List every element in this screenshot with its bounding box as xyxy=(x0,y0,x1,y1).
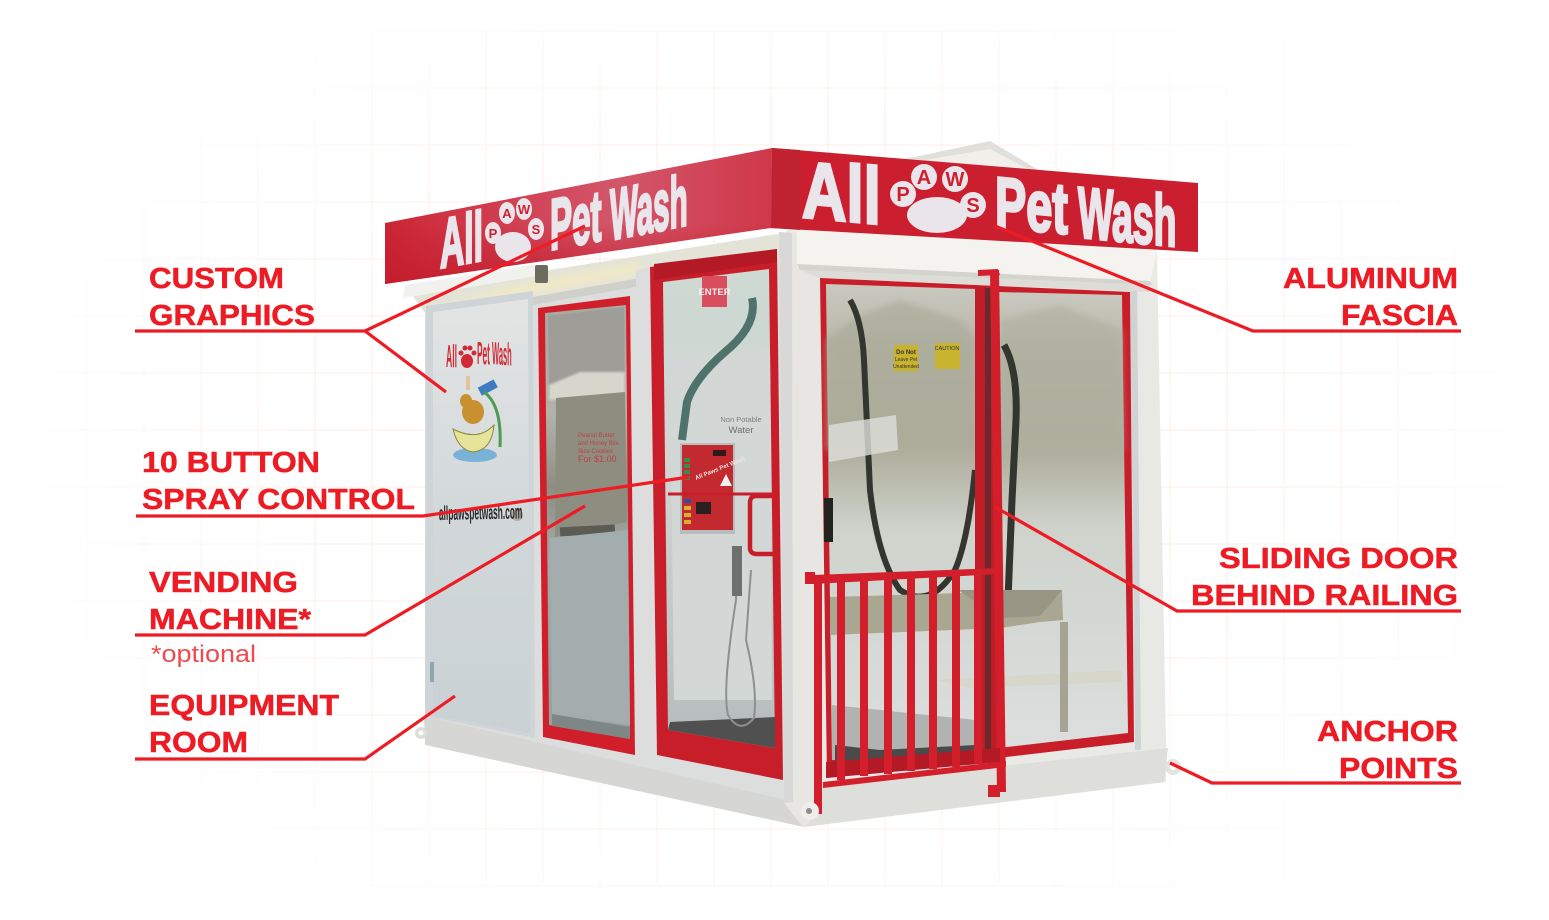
label: sliding door behind railing: SLIDING DOOR xyxy=(1219,543,1458,575)
left fascia sign xyxy=(385,148,772,284)
window reflections xyxy=(548,307,625,395)
leader: spray control xyxy=(136,477,689,516)
leader: aluminum fascia xyxy=(995,226,1461,331)
tree reflections xyxy=(826,300,976,450)
door decal logo: All xyxy=(446,338,457,374)
door decal logo: Wash xyxy=(492,335,512,373)
label: sliding door behind railing xyxy=(1191,543,1458,612)
vending machine window: Size Cookies xyxy=(578,449,613,455)
right post xyxy=(1130,280,1166,750)
right wall xyxy=(786,230,1166,827)
right base xyxy=(804,748,1168,827)
label: anchor points: ANCHOR xyxy=(1317,716,1458,748)
white panel under right fascia xyxy=(797,226,1157,284)
yellow warning signs: CAUTION xyxy=(935,346,959,352)
entry door xyxy=(650,249,783,780)
left fascia sign: Pet xyxy=(550,175,602,265)
light bar and camera xyxy=(403,264,548,298)
leader: sliding door xyxy=(995,507,1461,611)
kiosk photo illustration xyxy=(385,141,1198,828)
wash tub xyxy=(830,590,1063,635)
wash hose xyxy=(682,298,753,440)
vending machine window xyxy=(538,296,635,755)
label: 10 button spray control: 10 BUTTON xyxy=(142,447,320,479)
door web address: allpawspetwash.com xyxy=(439,502,523,525)
paw logo xyxy=(485,198,544,262)
leader: custom graphics xyxy=(135,226,585,392)
yellow warning signs: Unattended xyxy=(893,364,919,370)
label: custom graphics xyxy=(149,263,315,332)
label: vending machine: MACHINE* xyxy=(149,604,312,636)
left fascia sign: All xyxy=(440,196,483,283)
label: anchor points xyxy=(1317,716,1458,785)
right fascia sign: Wash xyxy=(1078,173,1176,263)
paw logo: W xyxy=(518,202,531,217)
label: sliding door behind railing: BEHIND RAILING xyxy=(1191,580,1458,612)
sliding door railing xyxy=(805,269,1006,814)
door decal logo xyxy=(446,335,512,374)
left base xyxy=(424,716,804,827)
back wall xyxy=(670,350,772,700)
paw logo: S xyxy=(532,222,541,237)
sprayer and hose xyxy=(726,546,755,726)
upper left wall trim xyxy=(410,232,790,320)
vending machine window: and Honey Bite xyxy=(578,441,620,447)
dark wash hose xyxy=(850,300,975,597)
label: 10 button spray control: SPRAY CONTROL xyxy=(142,484,415,516)
door knob xyxy=(511,509,523,521)
yellow warning signs xyxy=(893,343,960,371)
label: custom graphics: CUSTOM xyxy=(149,263,284,295)
vertical post between windows xyxy=(636,267,656,757)
callout lines xyxy=(135,226,1461,783)
door decal logo: Pet xyxy=(477,335,490,371)
notice on glass xyxy=(829,415,898,462)
equipment room door xyxy=(425,291,535,738)
paw logo: W xyxy=(946,169,965,191)
paw logo: S xyxy=(966,195,980,217)
leader: vending machine xyxy=(135,506,585,635)
roof gable xyxy=(900,141,1042,172)
note: optional: *optional xyxy=(151,641,256,668)
water sign: Non Potable xyxy=(720,415,762,424)
door lock xyxy=(824,498,833,542)
label: equipment room xyxy=(149,690,339,759)
paw logo: A xyxy=(917,167,931,189)
anchor points xyxy=(415,727,1181,820)
leader: equipment room xyxy=(135,696,455,759)
floor mat xyxy=(668,717,775,748)
10 button spray control panel xyxy=(680,443,746,534)
paw logo: P xyxy=(489,226,498,241)
enter sign xyxy=(698,276,731,307)
corner post xyxy=(779,232,823,828)
vending sign text: Peanut Butter xyxy=(578,433,615,439)
water sign xyxy=(720,415,762,436)
icon: washing dog in tub xyxy=(453,376,500,462)
label: custom graphics: GRAPHICS xyxy=(149,300,315,332)
center mullions xyxy=(975,286,998,751)
enter sign: ENTER xyxy=(698,287,731,298)
yellow warning signs: Leave Pet xyxy=(895,357,918,363)
paw logo: P xyxy=(896,184,910,206)
label: vending machine xyxy=(149,567,312,636)
right fascia sign: All xyxy=(802,145,881,242)
10 button spray control panel: All Paws Pet Wash xyxy=(695,456,746,482)
label: aluminum fascia: ALUMINUM xyxy=(1283,263,1458,295)
label: aluminum fascia: FASCIA xyxy=(1341,300,1458,332)
door push bar and pull handle xyxy=(668,494,776,554)
yellow warning signs: Do Not xyxy=(896,350,916,356)
left fascia sign: Wash xyxy=(610,160,688,256)
front glass left pane xyxy=(820,278,1134,778)
label: anchor points: POINTS xyxy=(1339,753,1458,785)
vending machine xyxy=(555,392,627,537)
hinge xyxy=(430,662,434,682)
right fascia sign xyxy=(771,145,1198,263)
leader: anchor points xyxy=(1170,763,1461,783)
paw logo: A xyxy=(502,206,512,221)
floor xyxy=(832,705,976,760)
right fascia sign: Pet xyxy=(995,162,1068,249)
label: equipment room: ROOM xyxy=(149,727,248,759)
left wall xyxy=(425,236,786,802)
water sign: Water xyxy=(729,425,753,436)
paw logo xyxy=(890,164,986,233)
label: aluminum fascia xyxy=(1283,263,1458,332)
label: vending machine: VENDING xyxy=(149,567,298,599)
label: 10 button spray control xyxy=(142,447,415,516)
vending machine window: For $1.00 xyxy=(578,454,617,464)
shelf xyxy=(935,670,1122,688)
label: equipment room: EQUIPMENT xyxy=(149,690,339,722)
